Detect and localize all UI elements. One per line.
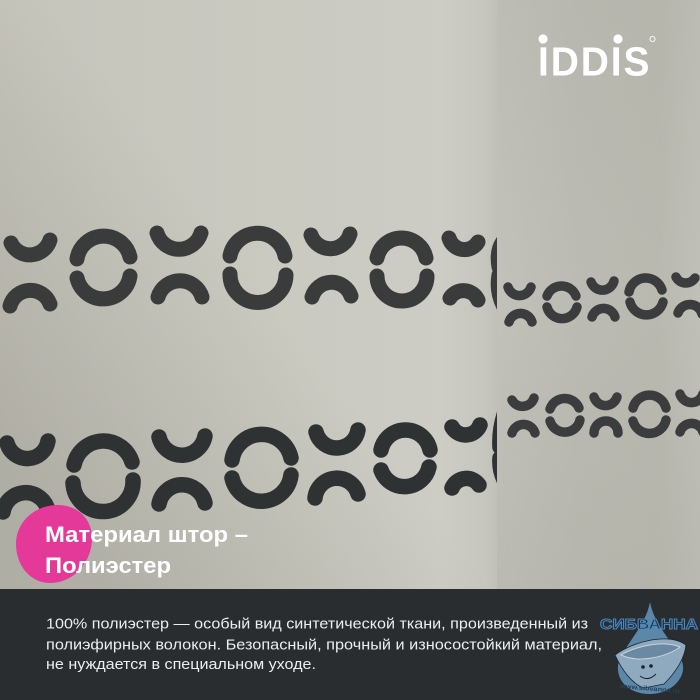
background: curtain fabric right fold bbox=[497, 0, 700, 589]
watermark: Sibvanna logo bbox=[600, 602, 698, 695]
description text: не нуждается в специальном уходе. bbox=[46, 656, 316, 673]
description text: 100% полиэстер — особый вид синтетической ткани, произведенный из bbox=[46, 616, 588, 632]
heading: material: Полиэстер bbox=[45, 553, 171, 578]
pattern row: lower band on right fold bbox=[512, 394, 700, 433]
description text: полиэфирных волокон. Безопасный, прочный и износостойкий материал, bbox=[46, 636, 602, 654]
pattern row: upper band on left panel bbox=[10, 233, 504, 307]
background: curtain fabric left panel bbox=[0, 0, 497, 589]
pattern row: lower band on left panel bbox=[3, 412, 505, 512]
logo: IDDIS: IDDIS bbox=[538, 40, 651, 85]
heading: material: Материал штор – bbox=[45, 522, 248, 547]
pink accent blob bbox=[16, 505, 92, 583]
description text bbox=[46, 616, 602, 673]
footer bar bbox=[0, 589, 700, 700]
watermark: Sibvanna logo: www.sibvanna.ru bbox=[619, 683, 680, 695]
watermark: Sibvanna logo: СИБВАННА bbox=[600, 616, 698, 633]
pattern row: upper band on right fold bbox=[508, 277, 700, 322]
heading: material bbox=[45, 522, 248, 578]
